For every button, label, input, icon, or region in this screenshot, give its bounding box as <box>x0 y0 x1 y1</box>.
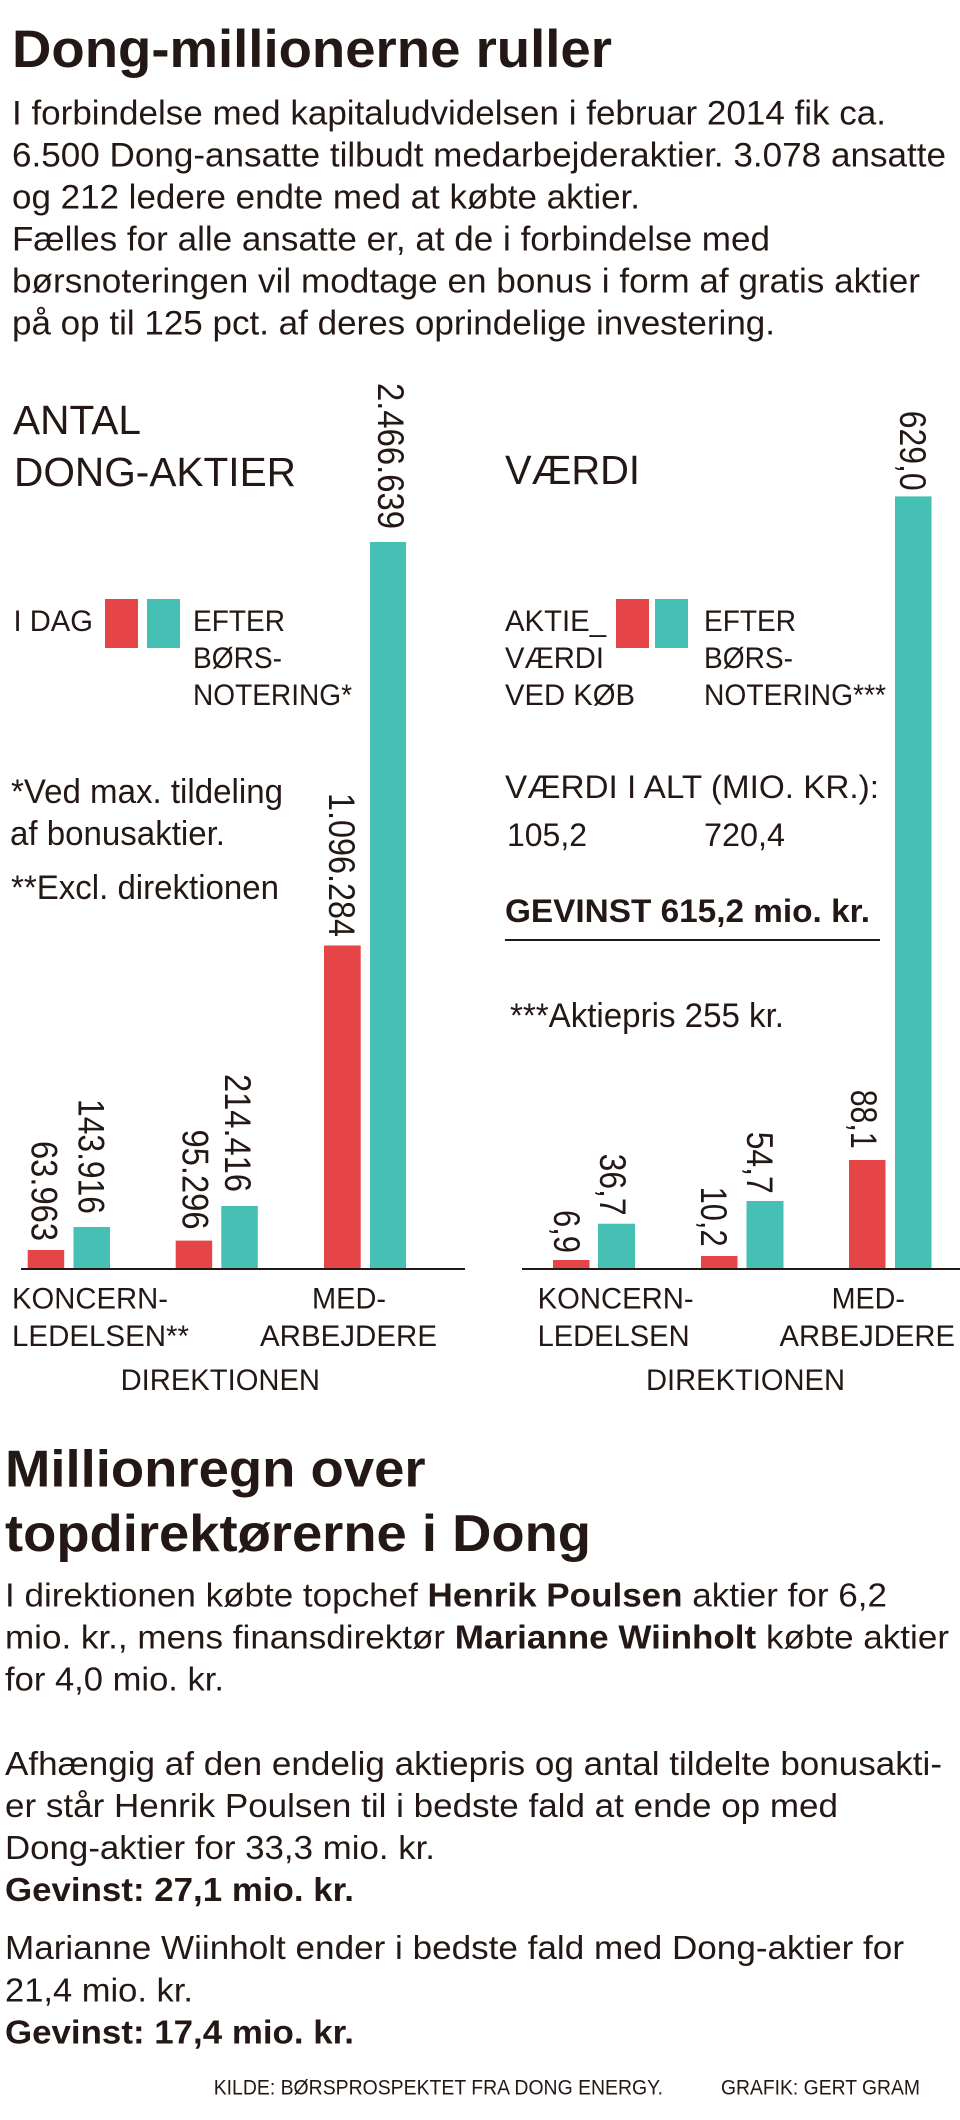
legend: antal <box>14 599 352 712</box>
legend: værdi <box>505 599 886 712</box>
category labels: antal: DIREKTIONEN <box>121 1364 320 1397</box>
heading: antal dong-aktier: ANTAL <box>13 397 141 443</box>
text block: marianne wiinholt: Marianne Wiinholt ender i bedste fald med Dong-aktier for <box>5 1929 904 1966</box>
totals block <box>505 769 880 941</box>
legend: værdi: EFTER <box>704 605 796 638</box>
text block: henrik poulsen: er står Henrik Poulsen til i bedste fald at ende op med <box>5 1787 838 1824</box>
text block: henrik poulsen: Afhængig af den endelig aktiepris og antal tildelte bonusakti- <box>5 1745 942 1782</box>
intro text block: Fælles for alle ansatte er, at de i forbindelse med <box>12 220 770 258</box>
intro text block: på op til 125 pct. af deres oprindelige investering. <box>12 304 775 342</box>
footnotes: antal: *Ved max. tildeling <box>11 773 283 811</box>
bar chart: antal aktier <box>21 383 465 1270</box>
text block: marianne wiinholt <box>5 1929 904 2051</box>
category labels: værdi: ARBEJDERE <box>780 1320 955 1353</box>
bar chart: værdi: 88,1 <box>843 1090 884 1149</box>
bar chart: antal aktier: 143.916 <box>70 1099 111 1214</box>
bar chart: antal aktier: 1.096.284 <box>321 793 362 937</box>
legend: værdi: BØRS- <box>704 642 793 675</box>
panel: antal dong-aktier <box>10 383 465 1397</box>
bar chart: værdi: 36,7 <box>592 1154 633 1216</box>
totals block: VÆRDI I ALT (MIO. KR.): <box>505 769 879 805</box>
heading: millionregn <box>5 1440 591 1563</box>
intro text block: børsnoteringen vil modtage en bonus i form af gratis aktier <box>12 262 920 300</box>
footnotes: antal: af bonusaktier. <box>10 815 225 853</box>
intro text block <box>12 94 946 342</box>
heading: antal dong-aktier <box>13 397 296 495</box>
category labels: værdi: KONCERN- <box>538 1282 694 1316</box>
heading: værdi: VÆRDI <box>505 447 640 493</box>
text block: direktionens køb <box>5 1577 949 1698</box>
intro text block: 6.500 Dong-ansatte tilbudt medarbejderaktier. 3.078 ansatte <box>12 136 946 174</box>
legend: antal: I DAG <box>14 605 93 638</box>
bar chart: værdi: 629,0 <box>892 411 933 491</box>
category labels: værdi: LEDELSEN <box>538 1320 690 1353</box>
category labels: antal <box>12 1282 437 1397</box>
source credits: KILDE: BØRSPROSPEKTET FRA DONG ENERGY. <box>214 2077 663 2100</box>
totals block: GEVINST 615,2 mio. kr. <box>505 893 870 929</box>
text block: henrik poulsen: Dong-aktier for 33,3 mio. kr. <box>5 1829 435 1866</box>
bar chart: værdi <box>522 411 960 1270</box>
text block: direktionens køb: mio. kr., mens finansdirektør Marianne Wiinholt købte aktier <box>5 1618 949 1655</box>
intro text block: og 212 ledere endte med at købte aktier. <box>12 178 640 216</box>
category labels: værdi: DIREKTIONEN <box>646 1364 845 1397</box>
text block: direktionens køb: for 4,0 mio. kr. <box>5 1661 224 1698</box>
legend: antal: NOTERING* <box>193 679 352 712</box>
legend: værdi: AKTIE_ <box>505 605 607 638</box>
category labels: antal: KONCERN- <box>12 1282 168 1316</box>
legend: antal: EFTER <box>193 605 285 638</box>
bar chart: antal aktier: 2.466.639 <box>370 383 411 529</box>
text block: henrik poulsen <box>5 1745 942 1908</box>
text block: marianne wiinholt: Gevinst: 17,4 mio. kr. <box>5 2014 354 2051</box>
heading: millionregn: Millionregn over <box>5 1440 426 1498</box>
source credits <box>214 2077 920 2100</box>
category labels: værdi: MED- <box>832 1282 905 1316</box>
heading: antal dong-aktier: DONG-AKTIER <box>14 449 296 495</box>
bar chart: antal aktier: 214.416 <box>217 1074 258 1192</box>
bar chart: antal aktier: 95.296 <box>174 1130 215 1230</box>
text block: henrik poulsen: Gevinst: 27,1 mio. kr. <box>5 1871 354 1908</box>
text block: direktionens køb: I direktionen købte topchef Henrik Poulsen aktier for 6,2 <box>5 1577 887 1614</box>
bar chart: antal aktier: 63.963 <box>24 1141 65 1241</box>
category labels: antal: ARBEJDERE <box>260 1320 437 1353</box>
footnote: værdi: ***Aktiepris 255 kr. <box>510 997 784 1035</box>
footnotes: antal: **Excl. direktionen <box>11 869 279 907</box>
bar chart: værdi: 6,9 <box>546 1210 587 1253</box>
legend: antal: BØRS- <box>193 642 282 675</box>
title: Dong-millionerne ruller <box>12 20 612 79</box>
intro text block: I forbindelse med kapitaludvidelsen i februar 2014 fik ca. <box>12 94 886 132</box>
panel: værdi <box>505 411 960 1397</box>
footnotes: antal <box>10 773 283 907</box>
source credits: GRAFIK: GERT GRAM <box>721 2077 920 2100</box>
totals block: 720,4 <box>704 817 785 853</box>
bar chart: værdi: 54,7 <box>739 1132 780 1194</box>
legend: værdi: NOTERING*** <box>704 679 886 712</box>
category labels: antal: LEDELSEN** <box>12 1320 189 1353</box>
legend: værdi: VÆRDI <box>505 642 604 675</box>
category labels: værdi <box>538 1282 955 1397</box>
text block: marianne wiinholt: 21,4 mio. kr. <box>5 1972 193 2008</box>
category labels: antal: MED- <box>312 1282 386 1316</box>
legend: værdi: VED KØB <box>505 679 635 712</box>
bar chart: værdi: 10,2 <box>693 1187 734 1247</box>
heading: millionregn: topdirektørerne i Dong <box>5 1505 591 1563</box>
totals block: 105,2 <box>507 817 587 853</box>
